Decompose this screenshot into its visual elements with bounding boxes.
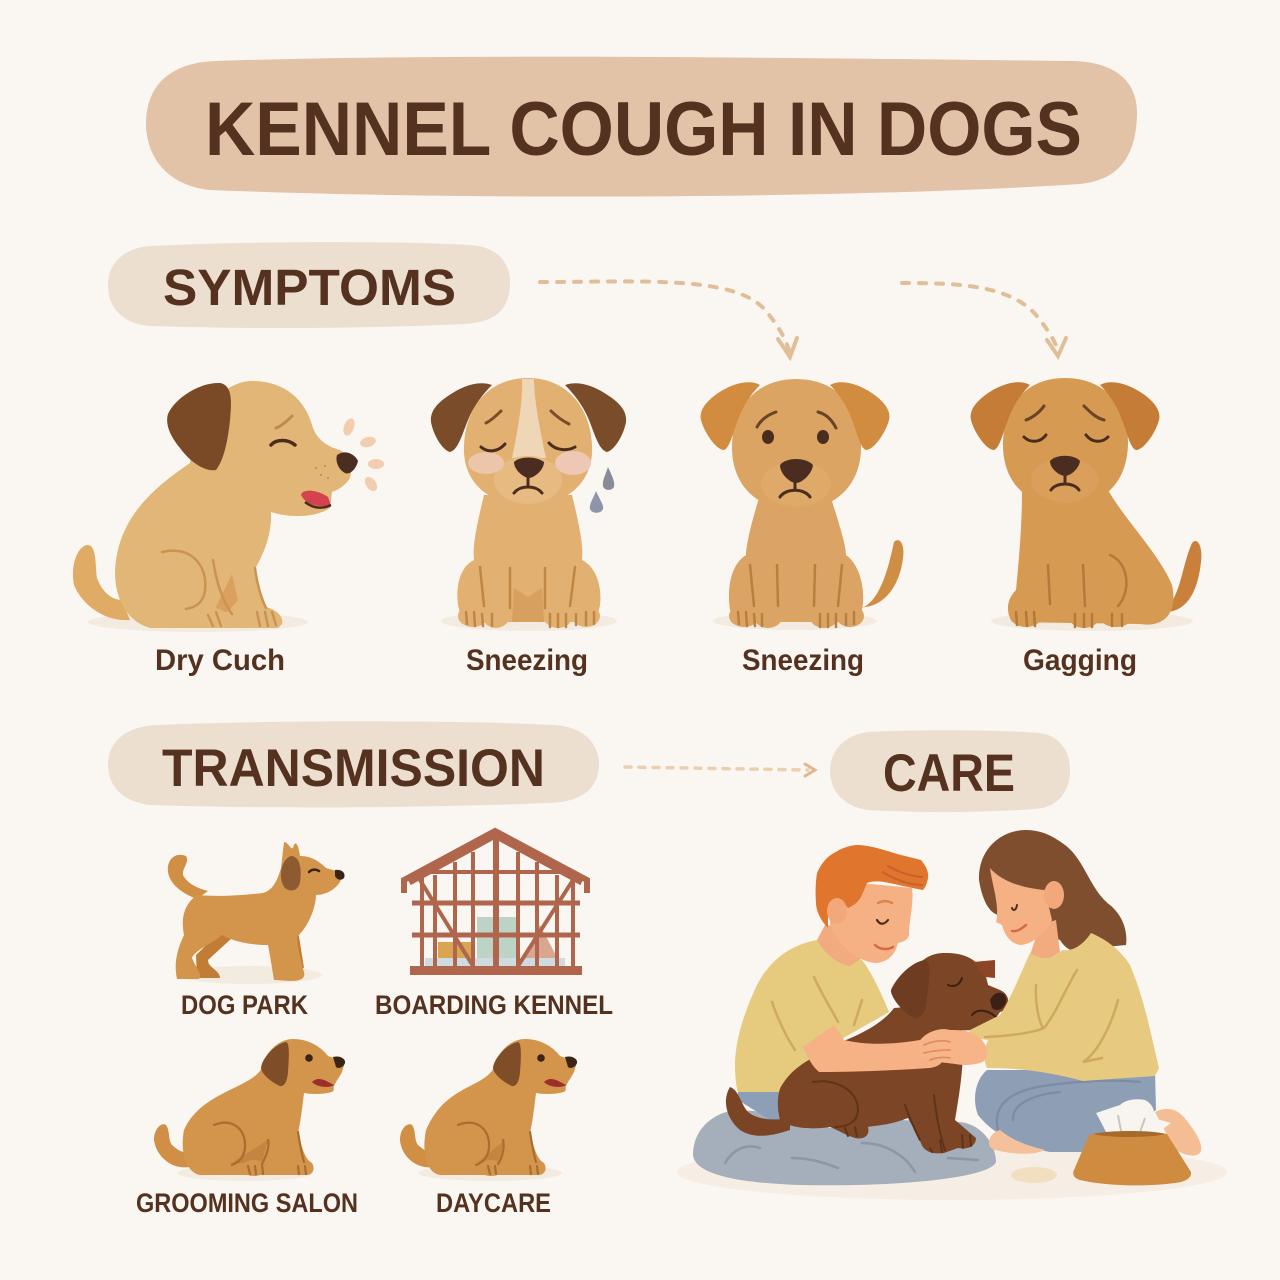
tears	[603, 467, 614, 490]
place: dog park	[168, 842, 345, 984]
tail	[154, 1124, 190, 1167]
stain	[1011, 1167, 1057, 1183]
body and head	[115, 381, 354, 628]
cough puffs	[341, 417, 384, 493]
tail	[1165, 541, 1201, 612]
ears	[431, 383, 492, 452]
muzzle	[494, 456, 562, 504]
body	[1008, 490, 1173, 625]
arrow: symptoms to fourth dog	[902, 283, 1066, 356]
heading: symptoms	[108, 242, 510, 328]
ears	[971, 382, 1030, 450]
label: sneezing: Sneezing	[466, 644, 588, 677]
tail	[862, 540, 903, 608]
ear	[261, 1042, 289, 1086]
body	[457, 495, 600, 622]
place: daycare	[400, 1039, 577, 1181]
head	[1003, 378, 1128, 506]
label: dry cuch: Dry Cuch	[155, 644, 285, 677]
head	[464, 378, 592, 505]
heading: transmission: TRANSMISSION	[162, 739, 545, 798]
ears	[701, 382, 760, 450]
face	[271, 440, 295, 445]
label: daycare: DAYCARE	[436, 1188, 551, 1218]
tail	[400, 1124, 435, 1167]
face	[757, 412, 836, 497]
title: KENNEL COUGH IN DOGS	[205, 87, 1082, 172]
label: boarding kennel: BOARDING KENNEL	[375, 990, 613, 1020]
tail	[168, 855, 208, 899]
care scene	[677, 830, 1227, 1200]
tail	[73, 545, 130, 620]
label: sneezing second: Sneezing	[742, 644, 864, 677]
ear	[493, 1042, 521, 1086]
heading: care	[830, 730, 1070, 812]
paws	[458, 605, 600, 628]
paws	[729, 605, 864, 628]
face	[1024, 406, 1108, 490]
tissue	[1096, 1099, 1171, 1140]
cushion	[693, 1111, 996, 1185]
symptom: sneezing dog, sad	[701, 379, 903, 630]
label: grooming salon: GROOMING SALON	[136, 1188, 358, 1218]
dog ear	[891, 960, 929, 1018]
place: grooming salon	[154, 1039, 345, 1181]
man shirt	[735, 940, 889, 1092]
woman hand	[918, 1029, 987, 1065]
far legs	[196, 930, 304, 978]
woman jeans	[975, 1070, 1156, 1152]
floor shadow	[677, 1144, 1227, 1200]
arrow: transmission to care	[625, 764, 815, 776]
heading: transmission	[108, 721, 599, 807]
woman feet	[989, 1130, 1045, 1154]
paws	[1010, 605, 1132, 628]
bowl	[1073, 1131, 1191, 1185]
body and head	[183, 1039, 345, 1175]
body and head	[424, 1039, 577, 1175]
ear	[281, 856, 301, 890]
head	[732, 379, 861, 510]
man jeans	[738, 1088, 790, 1120]
symptom: sneezing dog with tears	[431, 378, 626, 631]
heading: care: CARE	[883, 744, 1015, 803]
man arm	[803, 1025, 944, 1072]
woman hair back	[979, 830, 1126, 951]
kennel interior	[477, 917, 517, 961]
dog tail	[726, 1087, 790, 1136]
man neck and head	[817, 925, 878, 966]
label: gagging: Gagging	[1023, 644, 1137, 677]
label: dog park: DOG PARK	[181, 990, 308, 1020]
symptom: gagging dog	[971, 378, 1201, 631]
title	[146, 57, 1137, 197]
face	[481, 411, 575, 493]
body	[729, 495, 863, 622]
dog head	[905, 953, 1008, 1030]
kennel frame	[404, 831, 587, 966]
body and head	[176, 842, 343, 981]
ear	[167, 383, 231, 470]
symptom: dry cough dog	[73, 381, 384, 632]
woman shirt	[968, 933, 1159, 1081]
place: boarding kennel	[404, 831, 587, 975]
arrow: symptoms to third dog	[540, 281, 797, 357]
dog body	[778, 1005, 976, 1153]
woman neck and face	[1030, 920, 1060, 959]
cheeks	[468, 452, 504, 474]
blaze	[512, 379, 546, 458]
heading: symptoms: SYMPTOMS	[163, 259, 456, 316]
